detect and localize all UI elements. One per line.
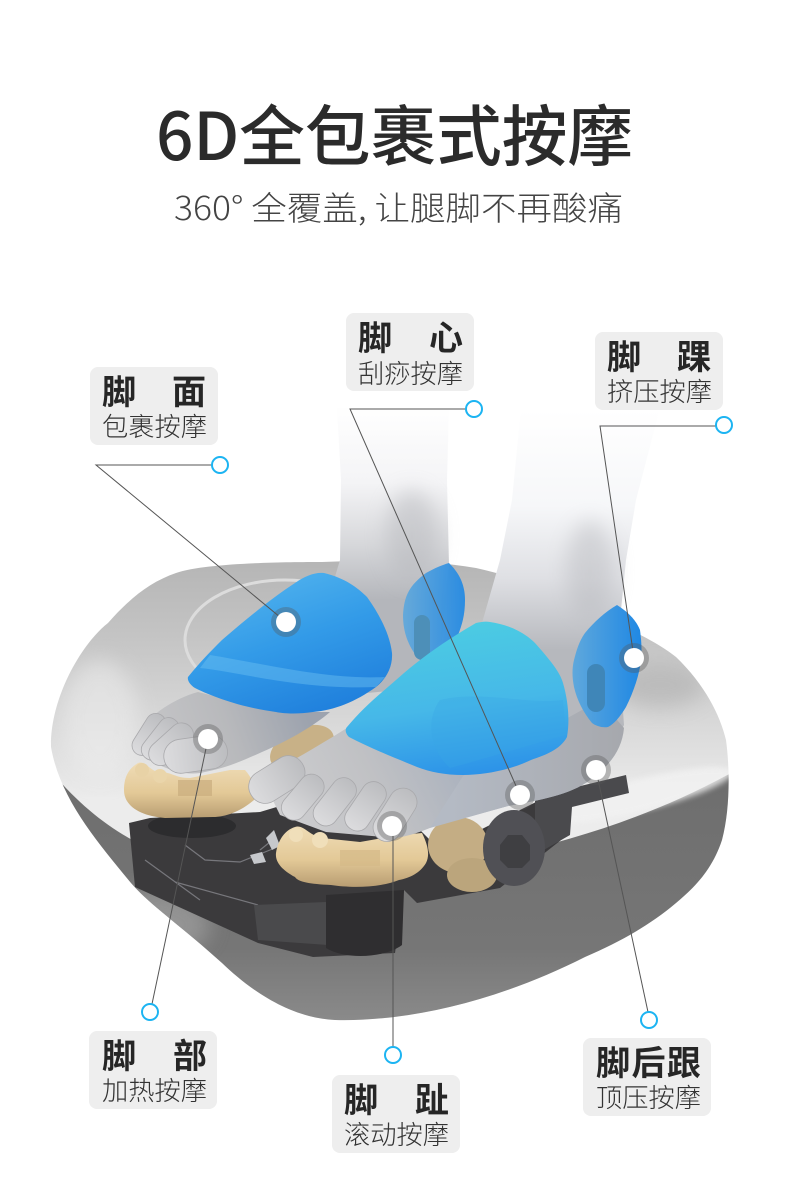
back leg shading — [386, 490, 438, 580]
callout: 脚面: 脚 — [102, 365, 136, 414]
back ankle capsule — [414, 615, 430, 660]
front ankle pad — [572, 605, 642, 727]
front massage head — [276, 827, 428, 887]
metal clips — [250, 830, 280, 864]
callout: 脚面: 包裹按摩 — [102, 407, 207, 444]
callout: 脚部: 加热按摩 — [102, 1071, 207, 1108]
back foot pad sheen — [200, 655, 385, 687]
callout: 脚心: 刮痧按摩 — [358, 354, 463, 391]
callout: 脚部 — [89, 724, 223, 1109]
title: 6D全包裹式按摩 — [156, 84, 633, 180]
callout: 脚部: 脚 — [102, 1029, 136, 1078]
callout: 脚趾: 趾 — [415, 1073, 449, 1122]
front foot top pad — [346, 622, 568, 775]
cylinder under left head — [148, 814, 236, 838]
callout: 脚心: 脚 — [358, 311, 392, 360]
callout: 脚趾: 滚动按摩 — [344, 1115, 449, 1152]
callout: 脚心: 心 — [429, 311, 463, 360]
rollers behind back foot — [263, 716, 341, 780]
front leg shading — [566, 520, 614, 620]
upper shell — [51, 561, 729, 1020]
callout: 脚后跟: 脚后跟 — [596, 1036, 701, 1085]
side rollers — [428, 817, 488, 873]
callout: 脚心 — [346, 311, 535, 810]
callout: 脚踝: 脚 — [607, 330, 641, 379]
back ankle pad — [403, 563, 465, 665]
foot massager product illustration — [40, 408, 740, 1040]
back foot top pad — [188, 573, 392, 714]
callout: 脚面 — [90, 365, 301, 637]
lower dark shell — [40, 580, 740, 1040]
callout: 脚后跟: 顶压按摩 — [596, 1078, 701, 1115]
callout: 脚踝: 挤压按摩 — [607, 372, 712, 409]
front leg — [480, 408, 660, 773]
subtitle: 360° 全覆盖, 让腿脚不再酸痛 — [174, 182, 623, 230]
callout: 脚趾 — [332, 811, 460, 1153]
callout: 脚踝: 踝 — [677, 330, 711, 379]
front foot — [243, 700, 624, 847]
mechanism frame — [129, 800, 570, 957]
front foot pad sheen — [431, 696, 566, 768]
bolt — [500, 835, 530, 868]
motor cylinder — [326, 890, 404, 956]
front ankle capsule — [587, 664, 605, 712]
disk — [483, 810, 545, 886]
back massage head — [124, 763, 255, 818]
callout: 脚面: 面 — [172, 365, 206, 414]
bracket — [535, 775, 629, 855]
callout: 脚趾: 脚 — [344, 1073, 378, 1122]
motor housing box — [254, 902, 328, 945]
back leg — [290, 408, 449, 700]
callout: 脚后跟 — [581, 755, 711, 1116]
callout: 脚部: 部 — [173, 1029, 207, 1078]
mechanism highlights — [145, 835, 300, 905]
callout: 脚踝 — [595, 330, 732, 673]
back foot — [128, 692, 330, 775]
